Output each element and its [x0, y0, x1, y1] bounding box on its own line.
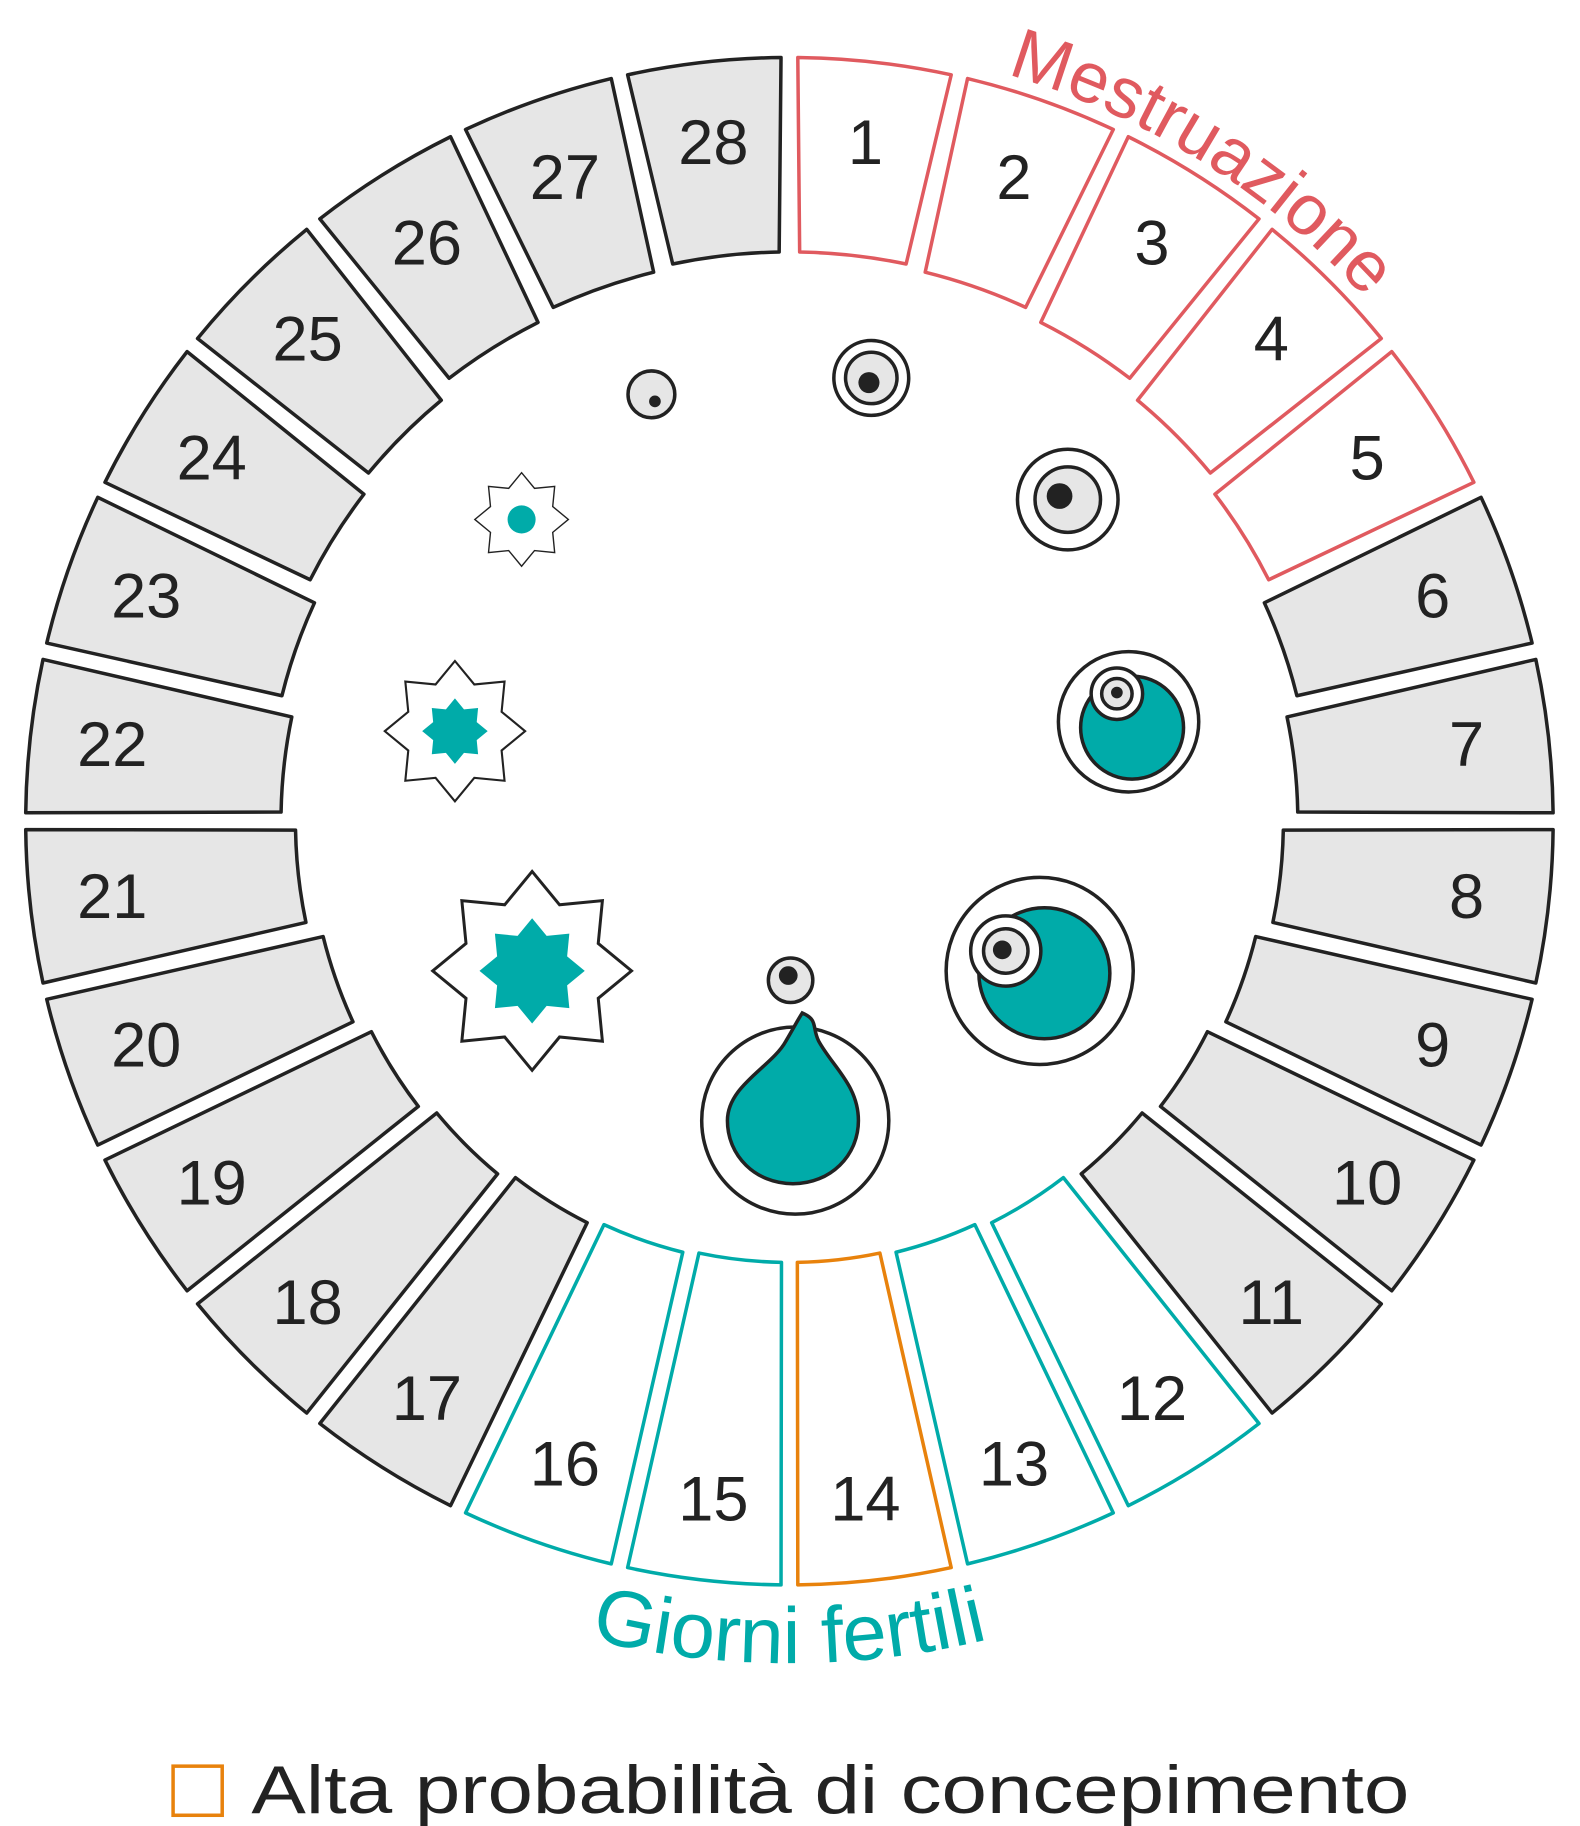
day numbers: 19 — [177, 1149, 247, 1219]
icon: mature follicle — [946, 877, 1133, 1064]
day numbers: 14 — [830, 1465, 901, 1535]
label: Mestruazione: Mestruazione — [1012, 29, 1385, 291]
day numbers: 27 — [530, 143, 600, 213]
day numbers: 13 — [979, 1429, 1049, 1499]
icon: corpus luteum medium — [385, 661, 525, 801]
day numbers: 9 — [1415, 1011, 1450, 1081]
day numbers: 26 — [392, 208, 462, 278]
day numbers: 3 — [1134, 208, 1170, 278]
day numbers: 15 — [678, 1465, 749, 1535]
day numbers: 25 — [272, 304, 343, 374]
day numbers: 16 — [530, 1429, 600, 1499]
day numbers: 6 — [1415, 562, 1450, 632]
day numbers: 28 — [678, 108, 749, 178]
day numbers: 22 — [77, 710, 147, 780]
icon: antral follicle — [1058, 652, 1199, 792]
day numbers — [77, 108, 1484, 1535]
label: Giorni fertili: Giorni fertili — [598, 1584, 984, 1664]
icon: corpus luteum large — [433, 871, 632, 1070]
day numbers: 8 — [1449, 862, 1484, 932]
icon: primordial follicle — [628, 371, 675, 418]
day numbers: 24 — [177, 424, 247, 494]
icon: secondary follicle — [1017, 449, 1118, 550]
day numbers: 17 — [392, 1364, 462, 1434]
day numbers: 23 — [111, 562, 181, 632]
day numbers: 4 — [1254, 304, 1289, 374]
icon: corpus luteum small — [475, 473, 568, 566]
day numbers: 5 — [1350, 424, 1385, 494]
day numbers: 12 — [1117, 1364, 1187, 1434]
day numbers: 2 — [996, 143, 1032, 213]
icon: ovulation — [702, 958, 889, 1214]
day numbers: 1 — [848, 108, 883, 178]
icon: primary follicle — [834, 341, 909, 415]
day numbers: 10 — [1332, 1149, 1402, 1219]
day numbers: 18 — [272, 1268, 343, 1338]
day numbers: 20 — [111, 1011, 181, 1081]
day numbers: 7 — [1449, 710, 1484, 780]
day numbers: 11 — [1238, 1268, 1304, 1338]
day numbers: 21 — [77, 862, 147, 932]
follicle icons — [385, 341, 1199, 1214]
legend: Alta probabilità di concepimento — [251, 1753, 1409, 1826]
